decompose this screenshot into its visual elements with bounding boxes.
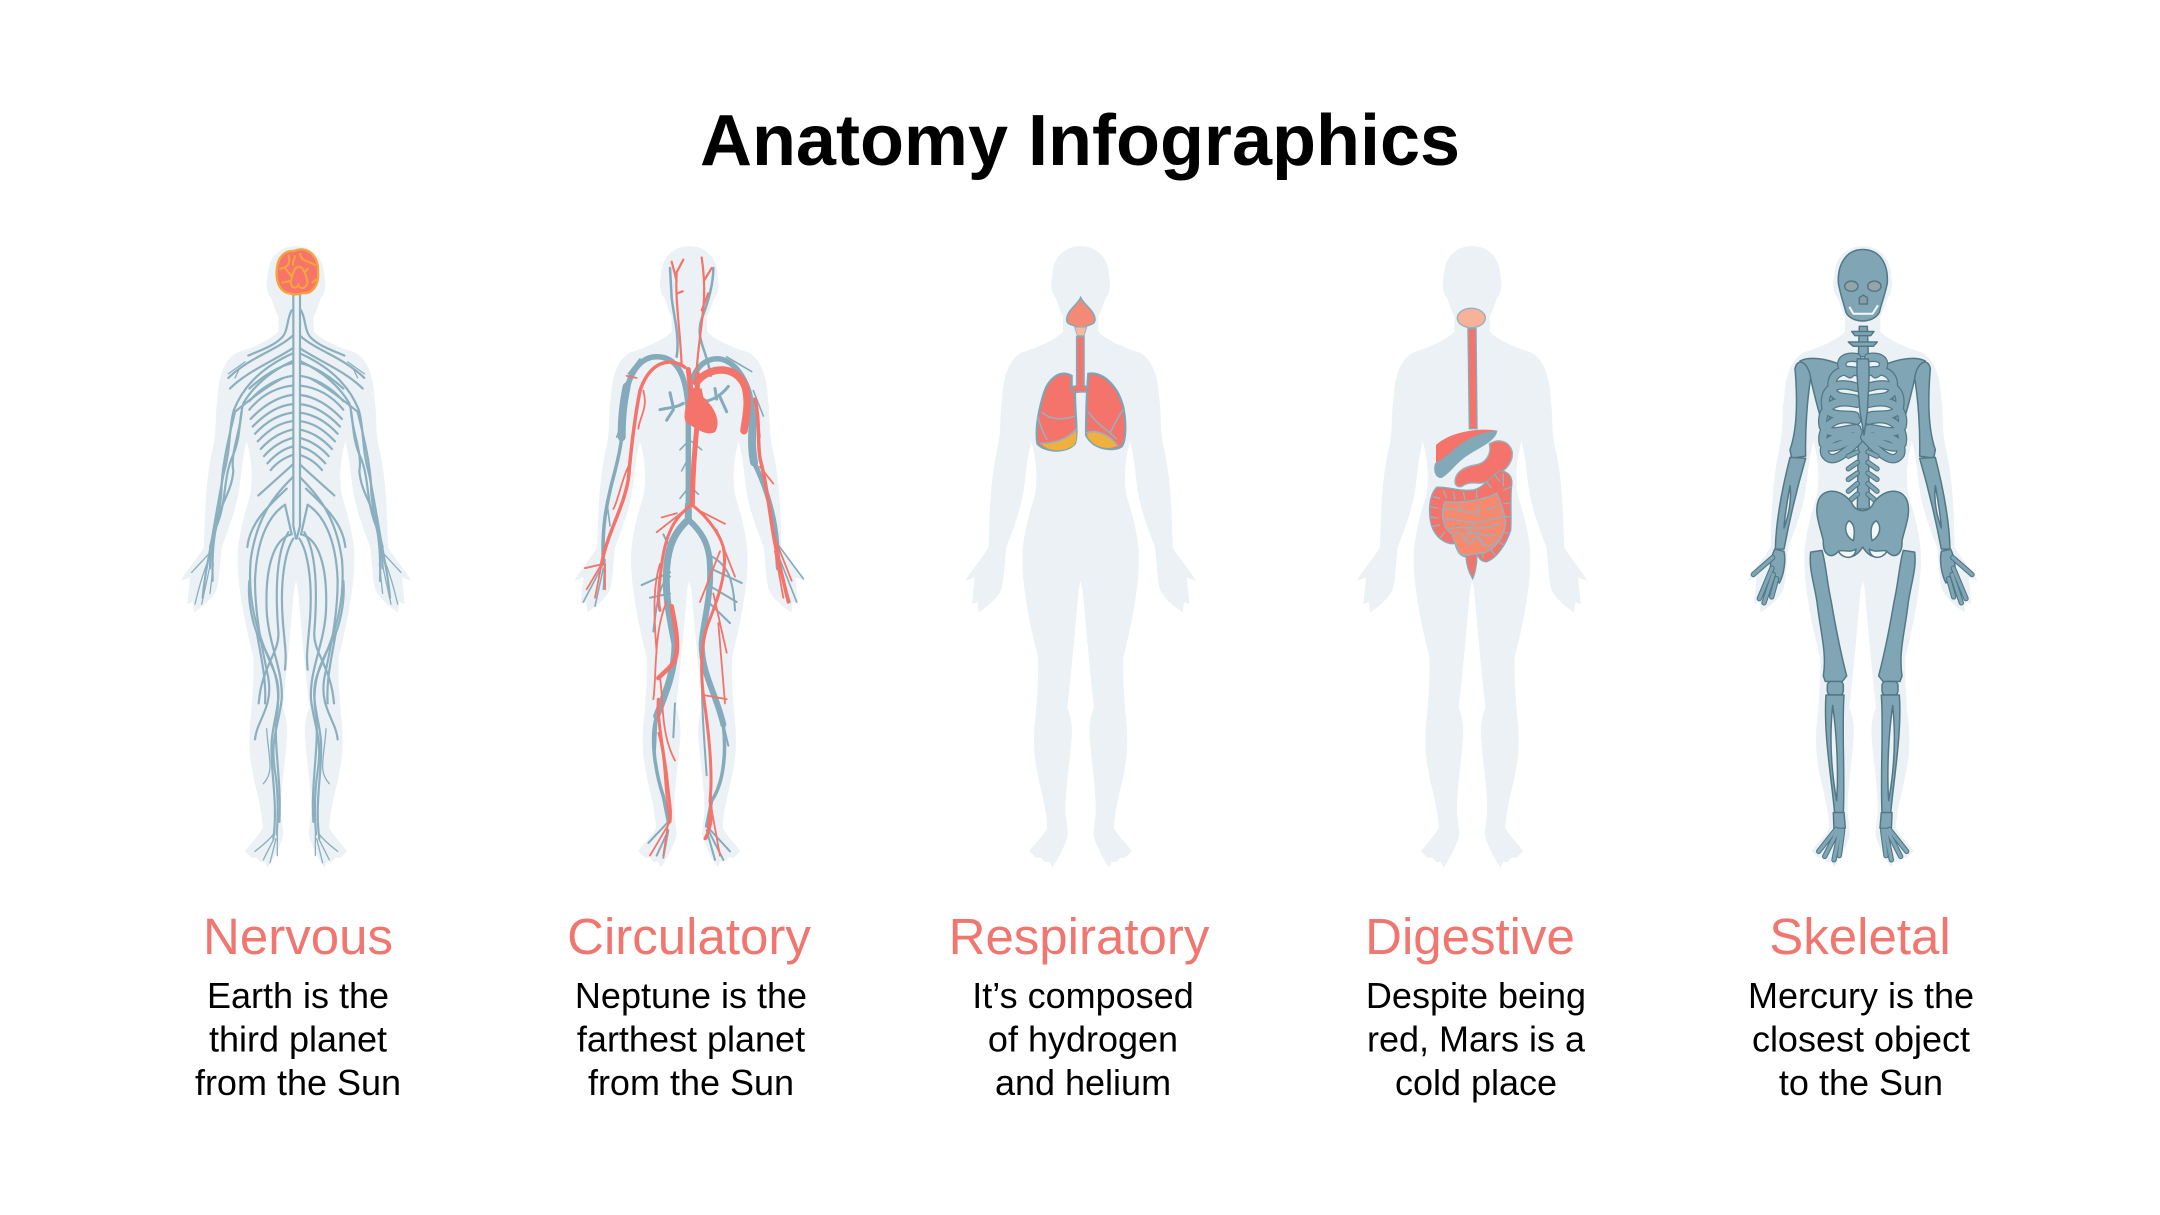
figure: respiratory system: [965, 246, 1196, 867]
scapula: [1800, 358, 1840, 437]
description: Respiratory: of hydrogen: [988, 1019, 1178, 1060]
panel: respiratory: [949, 246, 1210, 1103]
panel: nervous: [181, 246, 411, 1103]
ankle: [1833, 812, 1845, 830]
humerus: [1790, 362, 1811, 458]
palm: [1770, 549, 1785, 583]
description: Nervous: from the Sun: [195, 1062, 401, 1103]
veins: [583, 268, 803, 860]
nerve network: [192, 293, 401, 863]
lungs: [1037, 374, 1125, 451]
tibia and fibula: [1825, 695, 1844, 813]
panel: skeletal: [1747, 246, 1978, 1103]
forearm: [1775, 457, 1806, 549]
liver: [1436, 430, 1497, 470]
panel: digestive: [1357, 246, 1587, 1103]
heading: Skeletal: Skeletal: [1769, 908, 1951, 965]
esophagus: [1468, 329, 1477, 429]
description: Nervous: Earth is the: [207, 975, 389, 1016]
stomach: [1455, 441, 1512, 487]
description: Respiratory: It’s composed: [972, 975, 1194, 1016]
description: Nervous: third planet: [209, 1019, 387, 1060]
description: Circulatory: farthest planet: [577, 1019, 805, 1060]
description: Circulatory: from the Sun: [588, 1062, 794, 1103]
icon: heart: [685, 387, 718, 433]
small intestine: [1443, 493, 1506, 555]
panel: circulatory: [567, 246, 811, 1103]
large intestine: [1430, 471, 1512, 579]
pelvis: [1817, 491, 1909, 557]
title: Anatomy Infographics: [700, 101, 1460, 181]
description: Digestive: cold place: [1395, 1062, 1557, 1103]
gallbladder: [1434, 431, 1497, 478]
trachea: [1072, 337, 1087, 393]
thyroid: [1075, 327, 1087, 336]
figure: circulatory system: [574, 246, 805, 867]
ribs: [1800, 357, 1861, 501]
description: Digestive: Despite being: [1366, 975, 1586, 1016]
arteries: [585, 257, 792, 856]
figure: digestive system: [1357, 246, 1587, 867]
fingers: [1753, 558, 1777, 603]
figure: nervous system: [181, 246, 411, 867]
heading: Nervous: Nervous: [203, 908, 393, 965]
mouth: [1457, 308, 1485, 328]
description: Circulatory: Neptune is the: [575, 975, 807, 1016]
skull: [1838, 249, 1887, 321]
description: Skeletal: Mercury is the: [1748, 975, 1974, 1016]
sternum: [1857, 359, 1869, 435]
icon: brain: [277, 249, 318, 294]
heading: Digestive: Digestive: [1365, 908, 1575, 965]
femur: [1810, 550, 1847, 681]
intestine folds: [1443, 503, 1503, 547]
description: Respiratory: and helium: [995, 1062, 1171, 1103]
heading: Respiratory: Respiratory: [949, 908, 1210, 965]
toes: [1819, 829, 1843, 860]
larynx: [1067, 298, 1095, 328]
spine and neck: [1858, 326, 1868, 357]
description: Skeletal: to the Sun: [1779, 1062, 1943, 1103]
heading: Circulatory: Circulatory: [567, 908, 811, 965]
description: Digestive: red, Mars is a: [1367, 1019, 1586, 1060]
kneecap: [1827, 681, 1843, 695]
description: Skeletal: closest object: [1752, 1019, 1970, 1060]
figure: skeleton: [1747, 246, 1978, 867]
